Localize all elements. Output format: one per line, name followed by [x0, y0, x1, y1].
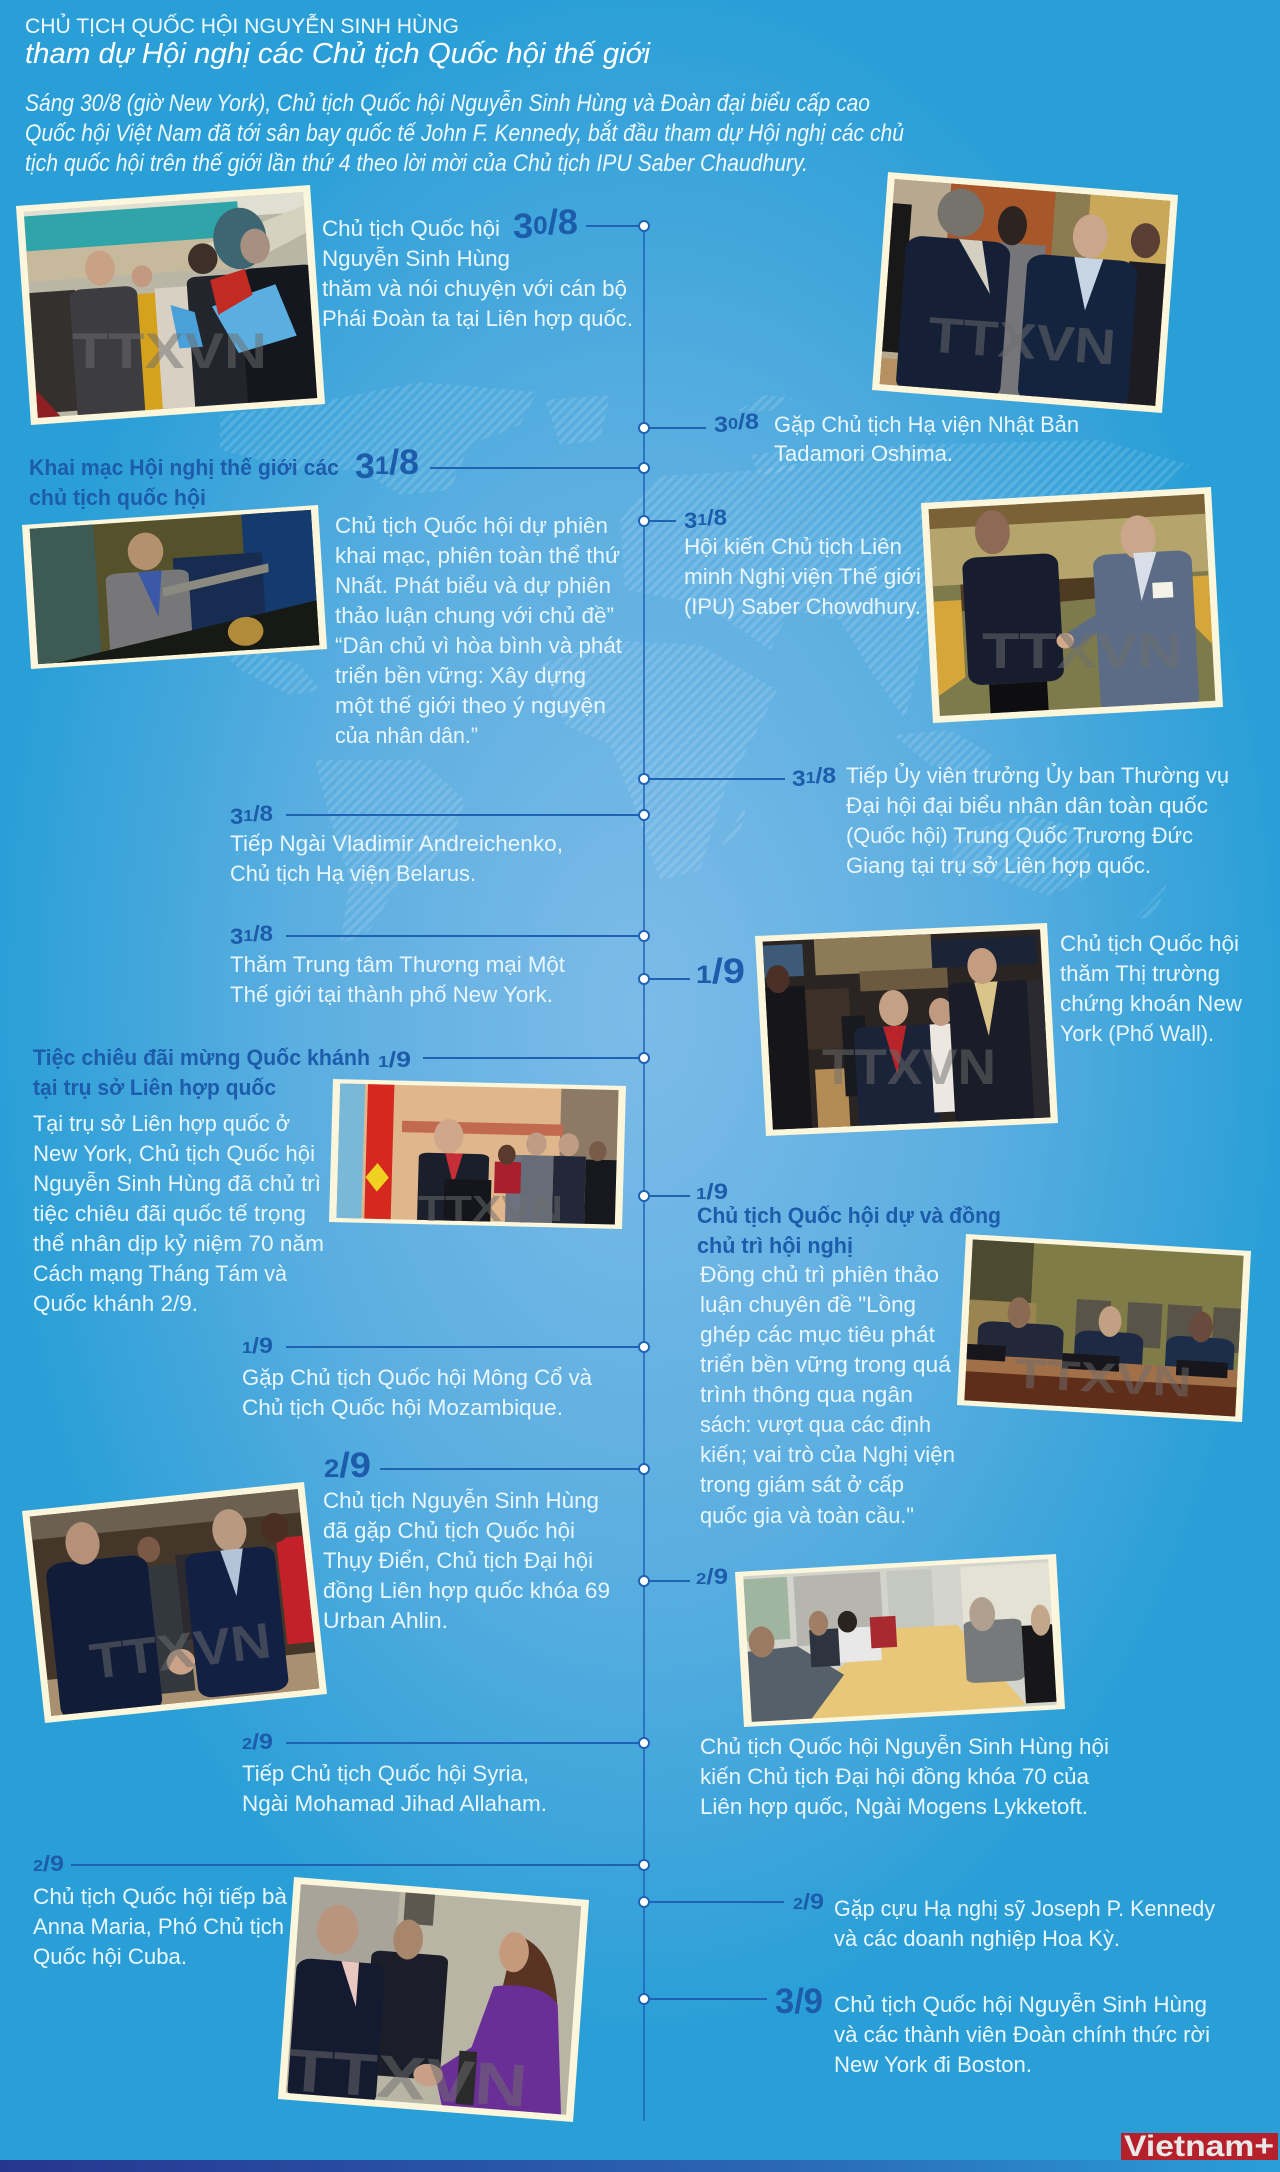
date: 1 [806, 770, 816, 787]
node [639, 774, 649, 784]
description: sách: vượt qua các định [700, 1412, 931, 1437]
node [639, 1897, 649, 1907]
description: (IPU) Saber Chowdhury. [684, 594, 921, 619]
connector [644, 1901, 784, 1903]
date: 3 [714, 412, 728, 437]
description: quốc gia và toàn cầu." [700, 1503, 914, 1528]
date: 1 [375, 452, 389, 480]
date: /8 [253, 801, 271, 826]
timeline item: 2/9 Urban Ahlin [323, 1446, 649, 1633]
node [639, 1860, 649, 1870]
timeline axis [643, 226, 645, 2121]
photo: airport arrival [16, 185, 325, 425]
description: thể nhân dịp kỷ niệm 70 năm [33, 1231, 324, 1256]
description: khai mạc, phiên toàn thể thứ [335, 543, 620, 568]
description: Tiếp Ngài Vladimir Andreichenko, [230, 831, 563, 856]
date: 3 [684, 508, 697, 533]
heading [33, 1045, 370, 1100]
timeline item: 31/8 China NPC [639, 763, 1229, 878]
date: 2/9 [242, 1729, 273, 1754]
date: 3 [230, 804, 243, 829]
photo: New York Stock Exchange: TTXVN [822, 1039, 996, 1095]
description [33, 1884, 288, 1969]
description: Giang tại trụ sở Liên hợp quốc. [846, 853, 1151, 878]
intro text: Sáng 30/8 (giờ New York), Chủ tịch Quốc hội Nguyễn Sinh Hùng và Đoàn đại biểu cấp cao [25, 89, 870, 117]
heading [29, 455, 339, 510]
photo: meeting Cuban vice president [278, 1877, 589, 2122]
node [639, 1464, 649, 1474]
connector [71, 1864, 644, 1866]
description: thảo luận chung với chủ đề” [335, 603, 614, 628]
node [639, 931, 649, 941]
connector [644, 520, 676, 522]
photo: New York Stock Exchange [755, 923, 1058, 1136]
description [834, 1896, 1215, 1951]
description [700, 1262, 955, 1528]
description: luận chuyên đề "Lồng [700, 1292, 916, 1317]
description: minh Nghị viện Thế giới [684, 564, 921, 589]
description: Hội kiến Chủ tịch Liên [684, 534, 902, 559]
description [834, 1992, 1210, 2077]
description: chứng khoán New [1060, 991, 1242, 1016]
description: của nhân dân.” [335, 723, 478, 748]
node [639, 516, 649, 526]
photo: speech at podium [22, 505, 327, 669]
description [230, 952, 565, 1007]
date: 2/9 [793, 1889, 824, 1914]
description: York (Phố Wall). [1060, 1021, 1214, 1046]
connector [286, 1346, 644, 1348]
connector [286, 1742, 644, 1744]
photo: meeting Cuban vice president: TTXVN [285, 2036, 530, 2120]
heading: Tiệc chiêu đãi mừng Quốc khánh [33, 1045, 370, 1070]
description [242, 1761, 547, 1816]
date: 1/9 [378, 1047, 411, 1072]
date: /8 [738, 409, 756, 434]
connector [380, 1468, 644, 1470]
description [322, 216, 633, 331]
node [639, 423, 649, 433]
description: Nhất. Phát biểu và dự phiên [335, 573, 611, 598]
timeline item: 2/9 Cuba [33, 1851, 649, 1969]
date: /8 [389, 443, 418, 482]
description: kiến Chủ tịch Đại hội đồng khóa 70 của [700, 1764, 1090, 1789]
connector [644, 1580, 690, 1582]
description [700, 1734, 1109, 1819]
description: triển bền vững: Xây dựng [335, 663, 586, 688]
date: 2/9 [324, 1446, 371, 1485]
description: Cách mạng Tháng Tám và [33, 1261, 288, 1286]
photo: conference panel: TTXVN [1013, 1350, 1193, 1406]
node [639, 1738, 649, 1748]
timeline item: 31/8 opening [29, 443, 649, 748]
description: Thăm Trung tâm Thương mại Một [230, 952, 565, 977]
title [25, 14, 652, 70]
description [846, 763, 1229, 878]
description: trình thông qua ngân [700, 1382, 913, 1407]
timeline item: 2/9 Joseph P. Kennedy [639, 1889, 1215, 1951]
logo: Vietnam+: Vietnam+ [1124, 2130, 1274, 2163]
date: /8 [816, 763, 834, 788]
photo: conference panel [957, 1234, 1251, 1422]
description: Ngài Mohamad Jihad Allaham. [242, 1791, 547, 1816]
description: thăm và nói chuyện với cán bộ [322, 276, 627, 301]
timeline item: 31/8 World Trade Center [230, 921, 649, 1007]
date: 3 [792, 766, 806, 791]
connector [644, 1195, 690, 1197]
date: /8 [707, 505, 725, 530]
description [242, 1365, 593, 1420]
description: một thế giới theo ý nguyện [335, 693, 606, 718]
date: 1/9 [696, 1179, 728, 1204]
heading: Khai mạc Hội nghị thế giới các [29, 455, 339, 480]
connector [430, 467, 644, 469]
description: Chủ tịch Quốc hội [322, 216, 500, 241]
description: Chủ tịch Quốc hội Nguyễn Sinh Hùng hội [700, 1734, 1109, 1759]
heading: tại trụ sở Liên hợp quốc [33, 1075, 276, 1100]
description: đã gặp Chủ tịch Quốc hội [323, 1518, 575, 1543]
description: Quốc khánh 2/9. [33, 1291, 198, 1316]
timeline item: 31/8 Belarus [230, 801, 649, 886]
node [639, 1994, 649, 2004]
timeline item: 3/9 departure [639, 1982, 1210, 2077]
description: “Dân chủ vì hòa bình và phát [335, 633, 622, 658]
description [230, 831, 563, 886]
date: 3 [355, 447, 375, 486]
date: 3 [230, 924, 243, 949]
description: New York đi Boston. [834, 2052, 1032, 2077]
footer band [0, 2160, 1280, 2172]
description: thăm Thị trường [1060, 961, 1220, 986]
description: Anna Maria, Phó Chủ tịch [33, 1914, 284, 1939]
description [323, 1488, 610, 1633]
description: Gặp Chủ tịch Hạ viện Nhật Bản [774, 412, 1079, 437]
timeline item: 2/9 Mogens Lykketoft [639, 1564, 1109, 1819]
photo: meeting Japanese House speaker [872, 172, 1178, 413]
date: /8 [548, 203, 577, 242]
description: Quốc hội Cuba. [33, 1944, 187, 1969]
world map background [220, 382, 1190, 945]
connector [423, 1057, 644, 1059]
description: Chủ tịch Quốc hội [1060, 931, 1239, 956]
date: /8 [253, 921, 271, 946]
description: Gặp cựu Hạ nghị sỹ Joseph P. Kennedy [834, 1896, 1215, 1921]
photo: meeting Urban Ahlin: TTXVN [87, 1612, 274, 1690]
title: CHỦ TỊCH QUỐC HỘI NGUYỄN SINH HÙNG [25, 14, 459, 38]
date: 0 [533, 212, 548, 240]
description [33, 1111, 324, 1316]
description: ghép các mục tiêu phát [700, 1322, 935, 1347]
intro text: tịch quốc hội trên thế giới lần thứ 4 theo lời mời của Chủ tịch IPU Saber Chaudhury. [25, 150, 808, 177]
timeline item: 2/9 Syria [242, 1729, 649, 1816]
connector [644, 1998, 767, 2000]
description: Tiếp Ủy viên trưởng Ủy ban Thường vụ [846, 763, 1229, 788]
description: Tại trụ sở Liên hợp quốc ở [33, 1111, 290, 1136]
photo: meeting Japanese House speaker: TTXVN [926, 307, 1118, 376]
date: 1/9 [696, 952, 745, 991]
date: 3/9 [775, 1982, 823, 2021]
timeline item: 30/8 delegation visit [322, 203, 649, 331]
photo: handshake with IPU president [921, 487, 1223, 723]
date: 3 [513, 207, 533, 246]
description: tiệc chiêu đãi quốc tế trọng [33, 1201, 306, 1226]
description: Tiếp Chủ tịch Quốc hội Syria, [242, 1761, 529, 1786]
node [639, 463, 649, 473]
description: Đồng chủ trì phiên thảo [700, 1262, 939, 1287]
connector [644, 978, 690, 980]
node [639, 1053, 649, 1063]
node [639, 1576, 649, 1586]
title: tham dự Hội nghị các Chủ tịch Quốc hội thế giới [25, 38, 652, 70]
node [639, 974, 649, 984]
heading: chủ trì hội nghị [697, 1233, 853, 1258]
description: Chủ tịch Quốc hội Mozambique. [242, 1395, 563, 1420]
heading: chủ tịch quốc hội [29, 485, 206, 510]
timeline item: 31/8 IPU [639, 505, 921, 619]
description: Chủ tịch Nguyễn Sinh Hùng [323, 1488, 599, 1513]
photo: meeting Urban Ahlin [22, 1482, 327, 1723]
heading [697, 1203, 1001, 1258]
description [684, 534, 921, 619]
photo: National Day reception [329, 1079, 626, 1229]
timeline item: 1/9 co-chairing conference [639, 1179, 1001, 1528]
timeline item: 1/9 Mongolia and Mozambique [242, 1333, 649, 1420]
connector [586, 225, 644, 227]
description: Phái Đoàn ta tại Liên hợp quốc. [322, 306, 633, 331]
heading: Chủ tịch Quốc hội dự và đồng [697, 1203, 1001, 1228]
description: Thụy Điển, Chủ tịch Đại hội [323, 1548, 593, 1573]
timeline item: 1/9 National Day reception [33, 1045, 649, 1316]
node [639, 1342, 649, 1352]
date: 2/9 [33, 1851, 64, 1876]
description: trong giám sát ở cấp [700, 1472, 904, 1497]
date: 0 [728, 416, 738, 433]
description: kiến; vai trò của Nghị viện [700, 1442, 955, 1467]
description: Tadamori Oshima. [774, 441, 953, 466]
timeline item: 1/9 Wall Street [639, 931, 1242, 1046]
node [639, 810, 649, 820]
description [335, 513, 622, 748]
connector [286, 935, 644, 937]
description: và các doanh nghiệp Hoa Kỳ. [834, 1926, 1120, 1951]
connector [286, 814, 644, 816]
description: Chủ tịch Hạ viện Belarus. [230, 861, 476, 886]
date: 1/9 [242, 1333, 273, 1358]
description [1060, 931, 1242, 1046]
date: 1 [697, 512, 707, 529]
description [774, 412, 1079, 466]
description: đồng Liên hợp quốc khóa 69 [323, 1578, 610, 1603]
description: Gặp Chủ tịch Quốc hội Mông Cổ và [242, 1365, 593, 1390]
photo: meeting table [735, 1554, 1065, 1727]
description: Liên hợp quốc, Ngài Mogens Lykketoft. [700, 1794, 1088, 1819]
intro text [25, 89, 904, 177]
photo: handshake with IPU president: TTXVN [982, 623, 1182, 679]
connector [644, 427, 706, 429]
description: Chủ tịch Quốc hội dự phiên [335, 513, 608, 538]
description: Chủ tịch Quốc hội tiếp bà [33, 1884, 288, 1909]
date: 2/9 [696, 1564, 728, 1589]
description: Nguyễn Sinh Hùng [322, 246, 510, 271]
photo: airport arrival: TTXVN [72, 323, 267, 379]
node [639, 1191, 649, 1201]
description: Chủ tịch Quốc hội Nguyễn Sinh Hùng [834, 1992, 1207, 2017]
description: và các thành viên Đoàn chính thức rời [834, 2022, 1210, 2047]
photo: National Day reception: TTXVN [418, 1188, 563, 1229]
intro text: Quốc hội Việt Nam đã tới sân bay quốc tế John F. Kennedy, bắt đầu tham dự Hội nghị các chủ [25, 120, 904, 147]
date: 1 [243, 808, 253, 825]
node [639, 221, 649, 231]
description: (Quốc hội) Trung Quốc Trương Đức [846, 823, 1193, 848]
description: Đại hội đại biểu nhân dân toàn quốc [846, 793, 1208, 818]
description: triển bền vững trong quá [700, 1352, 952, 1377]
description: New York, Chủ tịch Quốc hội [33, 1141, 315, 1166]
connector [644, 778, 785, 780]
description: Urban Ahlin. [323, 1608, 448, 1633]
timeline item: 30/8 Japan [639, 409, 1079, 466]
date: 1 [243, 928, 253, 945]
description: Thế giới tại thành phố New York. [230, 982, 553, 1007]
description: Nguyễn Sinh Hùng đã chủ trì [33, 1171, 321, 1196]
